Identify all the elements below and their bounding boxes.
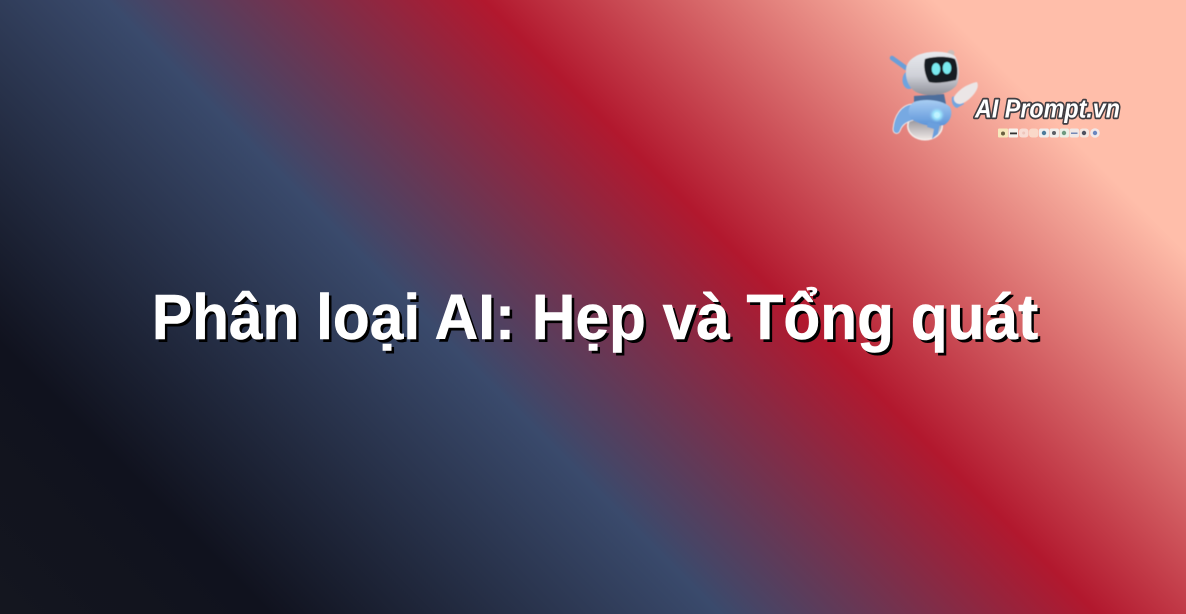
brand name: AI Prompt.vn [974,96,1120,124]
robot strap [927,122,940,139]
badge row [998,128,1100,138]
robot lower ball [907,112,943,140]
robot forearm [952,94,964,108]
logo: AI Prompt.vn [889,50,1121,142]
robot chest light [932,110,942,120]
title: Phân loại AI: Hẹp và Tổng quát [152,281,1038,353]
robot torso [909,100,951,126]
robot hand [954,82,978,104]
robot screen [924,57,957,83]
robot neck [914,94,946,106]
robot head [906,52,959,95]
robot side ear [902,71,916,89]
robot antenna [892,58,906,68]
robot left arm [893,104,914,133]
robot eyes [932,63,940,75]
icon: robot mascot [892,50,978,140]
robot right ear [948,50,954,56]
